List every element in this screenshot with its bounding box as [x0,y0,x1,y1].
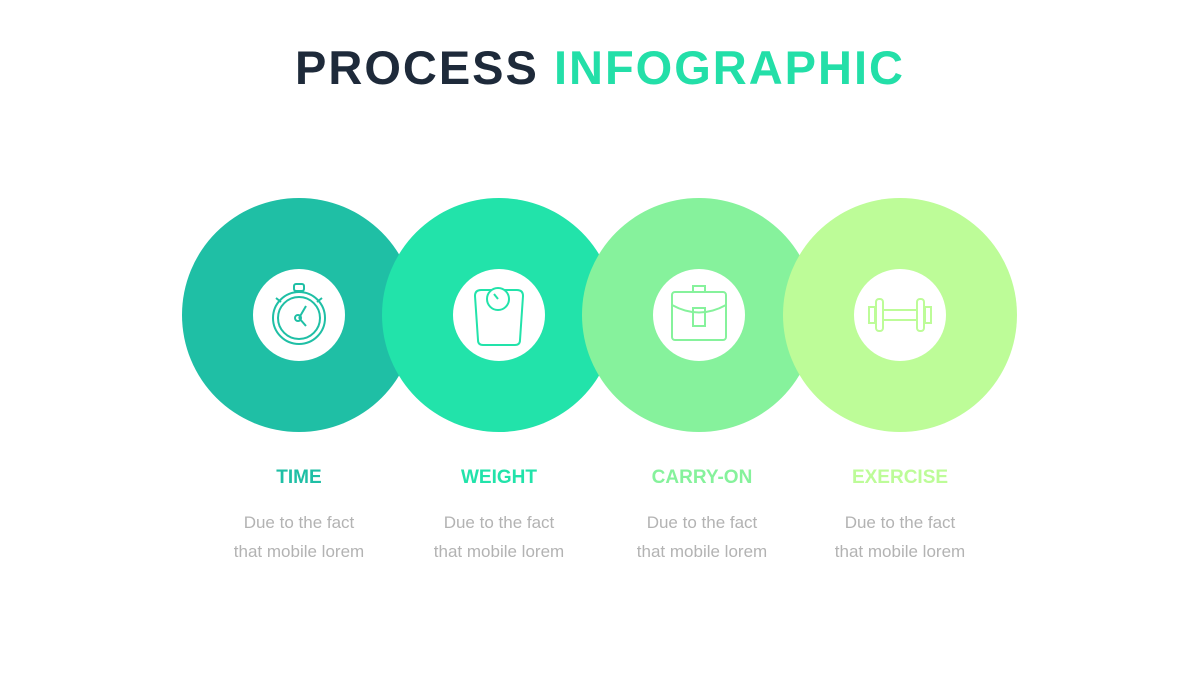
label: weight: WEIGHT [461,467,537,488]
title: PROCESS INFOGRAPHIC [295,41,905,94]
text: weight [434,513,564,561]
text: weight: that mobile lorem [434,542,564,561]
text: carry-on: Due to the fact [647,513,757,532]
text: time: that mobile lorem [234,542,364,561]
text: carry-on [637,513,767,561]
label: exercise: EXERCISE [852,467,948,488]
circle: exercise [783,198,1017,432]
text: exercise [835,513,965,561]
label: time: TIME [276,467,322,488]
icon: briefcase [672,286,726,340]
circle: time [182,198,416,432]
icon: dumbbell [869,299,931,331]
text: time [234,513,364,561]
text: time: Due to the fact [244,513,354,532]
label: carry-on: CARRY-ON [652,467,752,488]
circle: weight [382,198,616,432]
text: carry-on: that mobile lorem [637,542,767,561]
circle: carry-on [582,198,816,432]
text: exercise: Due to the fact [845,513,955,532]
text: exercise: that mobile lorem [835,542,965,561]
icon: stopwatch [273,284,325,344]
icon: scale [475,288,523,345]
text: weight: Due to the fact [444,513,554,532]
